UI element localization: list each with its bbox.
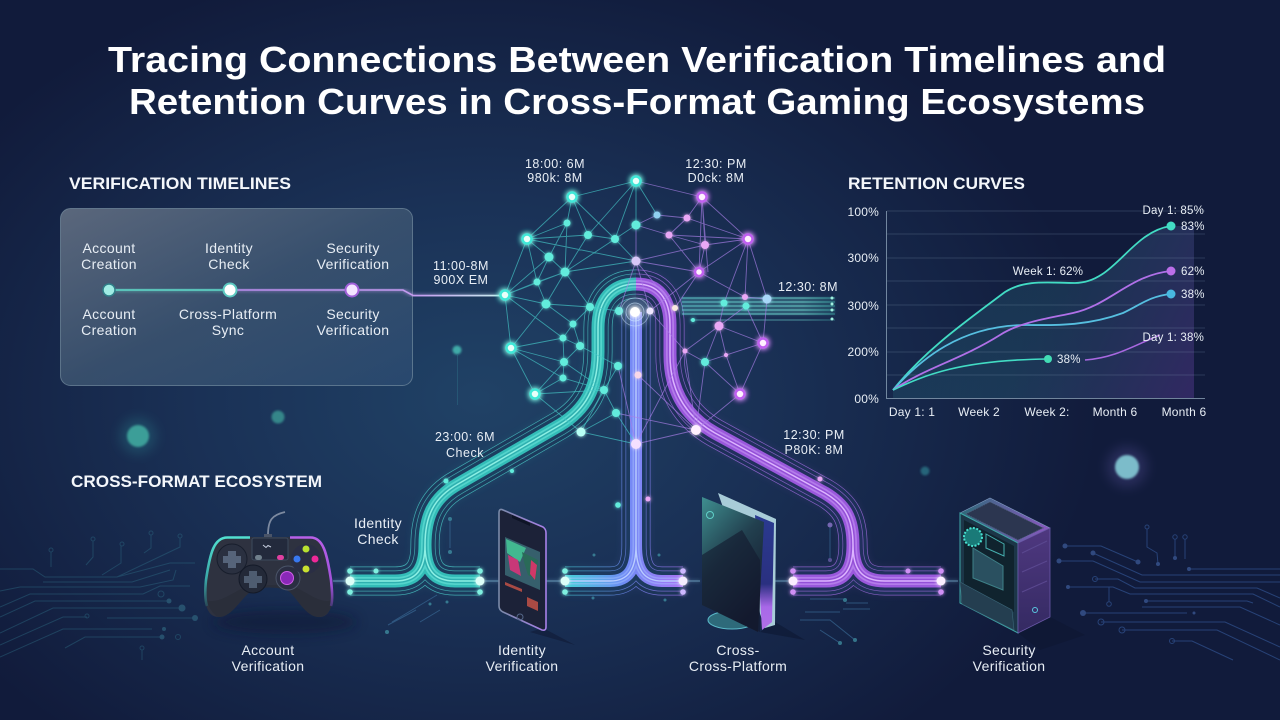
timeline labels: Verification xyxy=(317,322,389,338)
controller rims xyxy=(205,537,250,606)
label: identity verification: Verification xyxy=(486,658,558,674)
blue right dots xyxy=(678,568,688,595)
time labels: 12:30: PM xyxy=(783,428,845,442)
time labels: 12:30: 8M xyxy=(778,280,838,294)
timeline labels: Identity xyxy=(205,240,253,256)
chart value labels: 38% xyxy=(1057,354,1081,366)
network mesh xyxy=(505,181,767,444)
label: identity check: Identity xyxy=(354,515,402,531)
nodes purple outer xyxy=(695,192,768,398)
timeline nodes xyxy=(103,284,358,296)
timeline labels: Cross-Platform xyxy=(179,306,277,322)
chart area fill xyxy=(893,226,1194,398)
time labels: 12:30: PM xyxy=(685,157,747,171)
blue left dots xyxy=(560,568,570,595)
label: identity check xyxy=(354,515,402,547)
panel: verification timelines xyxy=(60,208,505,386)
teal right dots xyxy=(476,568,484,595)
y axis labels xyxy=(848,205,879,406)
time labels: D0ck: 8M xyxy=(688,171,744,185)
time labels xyxy=(433,157,845,460)
y axis labels: 200% xyxy=(848,345,879,359)
label: identity verification: Identity xyxy=(498,642,546,658)
label: cross-platform: Cross-Platform xyxy=(689,658,787,674)
nodes purple inner xyxy=(631,212,822,502)
flow: central blue trunk xyxy=(565,312,683,581)
icon: pc tower xyxy=(960,498,1085,650)
timeline labels: Check xyxy=(208,256,250,272)
center hub xyxy=(621,298,649,326)
nodes teal inner xyxy=(444,220,750,508)
label: cross-platform: Cross- xyxy=(716,642,760,658)
timeline connector xyxy=(109,290,505,296)
timeline labels xyxy=(81,240,389,338)
chart value labels: 62% xyxy=(1181,266,1205,278)
title xyxy=(108,39,1166,122)
nodes teal outer xyxy=(500,176,640,398)
curve teal xyxy=(893,226,1171,390)
time labels: 980k: 8M xyxy=(527,171,583,185)
title: Retention Curves in Cross-Format Gaming Ecosystems xyxy=(129,81,1145,122)
label: identity check: Check xyxy=(357,531,399,547)
curve blue xyxy=(893,294,1171,390)
chart value labels: Day 1: 85% xyxy=(1143,205,1204,217)
icon: game controller xyxy=(205,512,357,634)
flow: stream to chart xyxy=(680,296,835,320)
timeline labels: Creation xyxy=(81,256,137,272)
chart value labels xyxy=(1013,205,1205,366)
circuit decoration under connectors xyxy=(385,517,870,645)
flow: purple trunk xyxy=(636,284,941,581)
heading: retention curves: RETENTION CURVES xyxy=(848,175,1025,193)
x axis labels: Month 6 xyxy=(1093,405,1138,419)
time labels: 23:00: 6M xyxy=(435,430,495,444)
flow: teal trunk xyxy=(350,284,636,581)
label: identity verification xyxy=(486,642,558,674)
connector end dots xyxy=(333,568,958,595)
chart value labels: 83% xyxy=(1181,221,1205,233)
curve lower teal xyxy=(893,359,1048,390)
retention chart xyxy=(848,205,1207,419)
time labels: 18:00: 6M xyxy=(525,157,585,171)
x axis labels: Week 2: xyxy=(1024,405,1070,419)
chart value labels: Day 1: 38% xyxy=(1143,332,1204,344)
time labels: 11:00-8M xyxy=(433,259,489,273)
title: Tracing Connections Between Verification Timelines and xyxy=(108,39,1166,80)
chart value labels: Week 1: 62% xyxy=(1013,266,1083,278)
curve purple xyxy=(893,271,1171,390)
heading: cross-format ecosystem: CROSS-FORMAT ECOSYSTEM xyxy=(71,473,322,491)
circuit decoration right xyxy=(1056,525,1280,660)
teal left dots xyxy=(346,568,378,595)
network nodes xyxy=(444,176,822,508)
time labels: Check xyxy=(446,446,484,460)
x axis labels: Week 2 xyxy=(958,405,1000,419)
x axis labels: Day 1: 1 xyxy=(889,405,935,419)
timeline labels: Verification xyxy=(317,256,389,272)
label: cross-platform xyxy=(689,642,787,674)
heading: verification timelines: VERIFICATION TIMELINES xyxy=(69,175,291,193)
x axis labels xyxy=(889,405,1207,419)
mesh edges purple xyxy=(616,181,767,444)
chart markers xyxy=(1044,222,1176,363)
icon: smartphone xyxy=(499,509,575,645)
purple left dots xyxy=(788,568,798,595)
x axis labels: Month 6 xyxy=(1162,405,1207,419)
label: security verification: Security xyxy=(982,642,1036,658)
y axis labels: 00% xyxy=(854,392,879,406)
time labels: 900X EM xyxy=(434,273,488,287)
chart axes xyxy=(886,211,1205,398)
timeline labels: Security xyxy=(326,306,380,322)
circuit decoration left xyxy=(0,531,198,660)
mesh edges teal xyxy=(505,181,657,444)
label: account verification xyxy=(232,642,304,674)
chart grid xyxy=(887,211,1205,375)
purple right dots xyxy=(906,568,946,595)
y axis labels: 100% xyxy=(848,205,879,219)
timeline labels: Account xyxy=(82,306,136,322)
label: account verification: Account xyxy=(241,642,295,658)
timeline labels: Account xyxy=(82,240,136,256)
label: account verification: Verification xyxy=(232,658,304,674)
label: security verification xyxy=(973,642,1045,674)
timeline labels: Sync xyxy=(212,322,244,338)
curve lower purple xyxy=(1085,335,1160,360)
icon: game console xyxy=(702,493,805,640)
chart value labels: 38% xyxy=(1181,289,1205,301)
time labels: P80K: 8M xyxy=(785,443,843,457)
label: security verification: Verification xyxy=(973,658,1045,674)
y axis labels: 300% xyxy=(848,299,879,313)
timeline labels: Security xyxy=(326,240,380,256)
timeline labels: Creation xyxy=(81,322,137,338)
y axis labels: 300% xyxy=(848,251,879,265)
